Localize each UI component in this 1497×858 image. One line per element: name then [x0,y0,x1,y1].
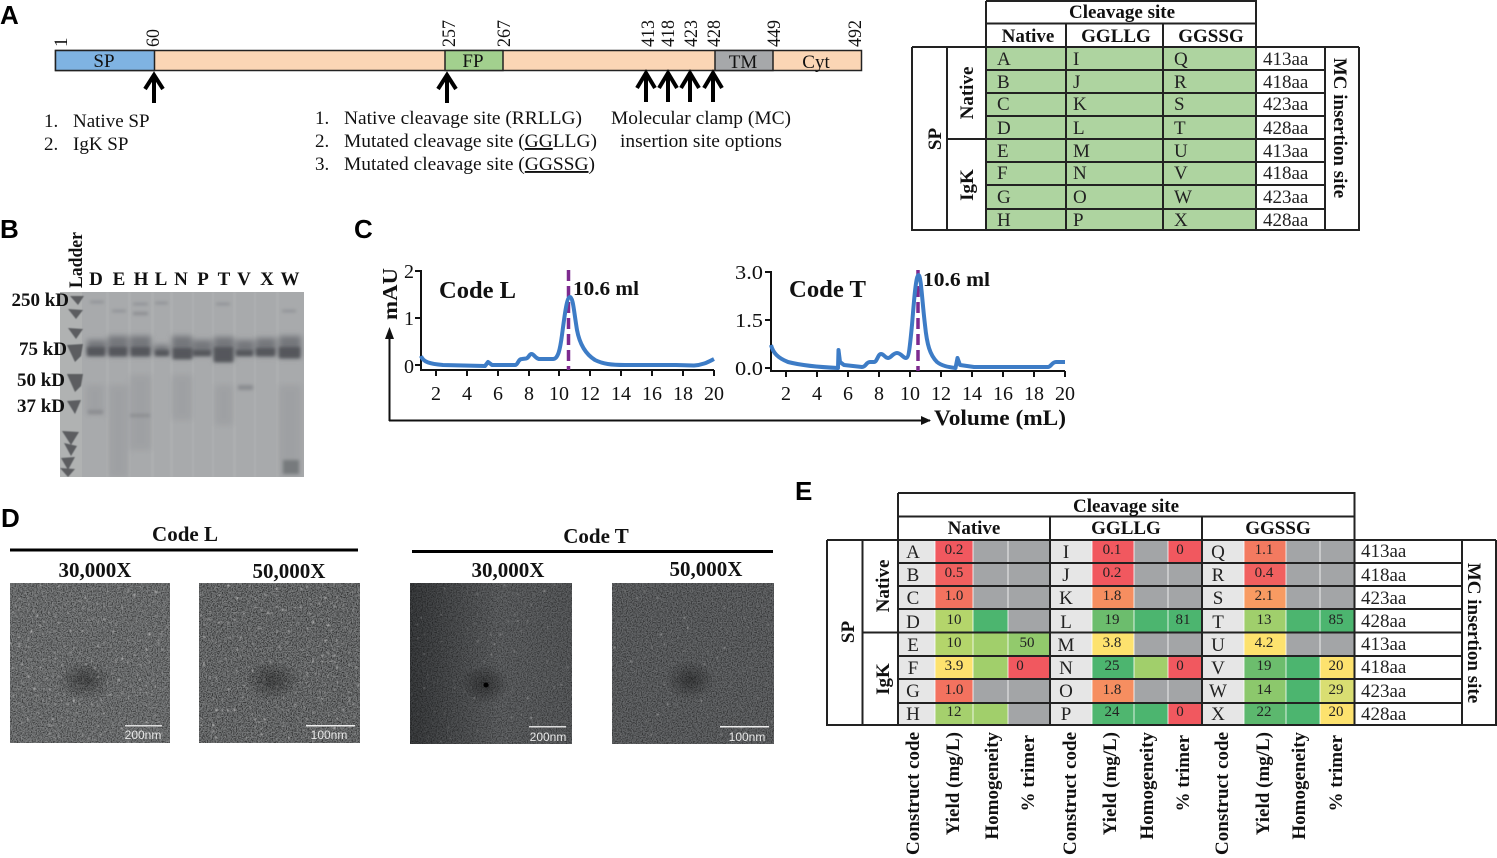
domain labels [93,51,830,73]
Code T heading [412,524,773,553]
molecular weight markers [11,290,69,417]
construct code letters: E [907,635,919,656]
Code L heading: Code L [152,522,218,546]
residue position numbers: 418 [658,20,679,47]
micrograph: Code L 30,000X: 200nm [125,728,161,742]
cleavage site options: 1. [315,108,329,129]
chart: Code L: 0 [404,356,414,378]
magnification labels: 30,000X [472,558,544,582]
side labels: IgK [957,169,978,201]
construct code letters: S [1213,588,1223,609]
MC insertion site labels: 423aa [1361,681,1407,702]
construct letters: T [1174,118,1186,139]
table headers [1002,2,1244,47]
chart: Code L [404,261,724,405]
construct code letters: L [1060,612,1072,633]
micrograph: Code T 50,000X [612,583,774,744]
Volume axis title: Volume (mL) [934,405,1066,430]
measured values: 0 [1176,704,1184,720]
MC insertion site labels [1361,541,1407,725]
construct code letters: U [1211,635,1225,656]
chart: Code L: 18 [673,383,693,405]
construct code letters: D [906,612,920,633]
residue position numbers: 428 [704,20,725,47]
micrograph: Code L 50,000X [199,583,360,743]
heatmap side labels: SP [838,621,859,643]
column labels: Yield (mg/L) [1100,732,1121,835]
chart: Code T: 16 [993,383,1013,405]
measured values: 2.1 [1255,588,1273,604]
construct code letters: B [907,565,919,586]
lane labels: T [218,269,231,290]
measured values: 19 [1256,658,1272,674]
residue position numbers: 492 [845,20,866,47]
construct letters: 413aa [1263,49,1309,70]
construct letters: 423aa [1263,94,1309,115]
ladder bands [60,296,84,477]
chart: Code L: 6 [493,383,503,405]
panel D: electron micrographs [1,503,774,744]
construct letters: N [1073,163,1087,184]
chart: Code L: 10.6 ml [573,278,639,300]
heatmap side labels: MC insertion site [1463,563,1484,703]
chart: Code L: 10 [549,383,569,405]
heatmap side labels: IgK [873,663,894,695]
heatmap headers: Native [948,518,1000,539]
molecular clamp note: insertion site options [620,131,782,152]
construct code letters: G [906,681,920,702]
lane labels: X [260,269,274,290]
measured values: 85 [1328,612,1344,628]
heatmap headers: Cleavage site [1073,496,1179,517]
construct letters: D [997,118,1011,139]
panel C: size exclusion chromatograms [354,214,1075,430]
measured values: 20 [1328,704,1344,720]
chart: Code T: 12 [931,383,951,405]
construct code letters: W [1209,681,1227,702]
measured values: 1.8 [1103,588,1121,604]
residue position numbers: 449 [764,20,785,47]
heatmap row B J R [898,563,1354,586]
table headers: GGLLG [1081,26,1151,47]
measured values: 0 [1176,542,1184,558]
chart: Code T: Code T [789,277,866,303]
magnification labels: 50,000X [253,559,325,583]
heatmap row H P X [898,703,1354,725]
MC insertion site labels: 428aa [1361,611,1407,632]
lane labels: P [197,269,209,290]
side labels [925,58,1350,201]
construct letters: P [1073,210,1084,231]
construct letters: F [997,163,1008,184]
magnification labels [59,557,742,583]
residue position numbers: 1 [51,38,72,47]
chart: Code T: 18 [1024,383,1044,405]
chart: Code L: 4 [462,383,472,405]
chart: Code T: 0.0 [735,358,763,380]
chart: Code T: 10.6 ml [923,269,990,291]
construct code letters: F [908,658,918,679]
table headers: GGSSG [1178,26,1244,47]
residue position numbers: 257 [439,20,460,47]
magnification labels: 30,000X [59,558,131,582]
lane labels: D [89,269,103,290]
construct code letters: I [1063,542,1069,563]
column labels: % trimer [1326,734,1347,811]
micrograph: Code L 30,000X [10,583,170,743]
molecular weight markers: 250 kD [11,290,69,311]
lane labels: W [280,269,300,290]
construct letters: M [1073,141,1090,162]
heatmap row G O W [898,679,1354,703]
gel image [60,292,304,477]
chart: Code L: 20 [704,383,724,405]
heatmap row A I Q [898,540,1354,563]
domain labels: TM [729,52,757,73]
lane labels: E [113,269,125,290]
chart: Code L: 12 [580,383,600,405]
measured values: 12 [946,704,962,720]
construct letters: J [1073,72,1080,93]
site arrows [145,73,722,103]
side labels: SP [925,128,946,150]
chart: Code T: 8 [874,383,884,405]
construct code letters: J [1062,565,1070,586]
construct code letters: K [1059,588,1073,609]
measured values: 20 [1328,658,1344,674]
construct letters: S [1174,94,1185,115]
residue position numbers: 413 [638,20,659,47]
measured values: 10 [946,635,962,651]
panel letter C: C [354,214,373,244]
measured values: 0.2 [1103,565,1121,581]
construct letters: C [997,94,1010,115]
MC insertion site labels: 418aa [1361,565,1407,586]
measured values [945,542,1344,720]
molecular weight markers: 37 kD [17,396,65,417]
construct letters: H [997,210,1011,231]
measured values: 14 [1256,682,1272,698]
signal peptide options [44,111,150,155]
molecular clamp note: Molecular clamp (MC) [611,108,791,129]
table headers: Native [1002,26,1054,47]
chart: Code T [735,262,1075,405]
panel letter B: B [0,214,19,244]
heatmap side labels: Native [873,560,894,612]
construct code letters: C [907,588,919,609]
construct code letters: P [1061,704,1071,725]
measured values: 29 [1328,682,1344,698]
axis arrowheads [385,327,931,425]
protein domain bar [56,50,862,70]
construct letters: 428aa [1263,118,1309,139]
heatmap row C K S [898,586,1354,609]
signal peptide options: 1. [44,111,58,132]
construct letters: O [1073,187,1087,208]
measured values: 0.5 [945,565,963,581]
green code cells [986,47,1256,230]
panel letter A: A [0,0,19,30]
residue position numbers: 423 [681,20,702,47]
measured values: 25 [1104,658,1120,674]
domain labels: Cyt [802,52,830,73]
panel letter D: D [1,503,20,533]
heatmap side labels [838,560,1484,703]
construct letters: 413aa [1263,141,1309,162]
measured values: 0.4 [1255,565,1274,581]
measured values: 1.0 [945,682,963,698]
measured values: 1.1 [1255,542,1273,558]
construct letters: E [997,141,1009,162]
table grid [912,1,1359,230]
panel A: construct code table [912,1,1359,231]
micrograph: Code L 50,000X: 100nm [311,728,347,742]
MC insertion site labels: 418aa [1361,657,1407,678]
chart: Code T: 2 [781,383,791,405]
measured values: 0.2 [945,542,963,558]
construct letters: 423aa [1263,187,1309,208]
chart: Code L: 14 [611,383,631,405]
column labels: % trimer [1018,734,1039,811]
column labels: Construct code [1060,732,1081,855]
measured values: 4.2 [1255,635,1273,651]
molecular weight markers: 75 kD [19,339,67,360]
construct letters: 428aa [1263,210,1309,231]
chart: Code T: 20 [1055,383,1075,405]
construct letters: I [1073,49,1079,70]
signal peptide options: Native SP [73,111,150,132]
construct letters: K [1073,94,1087,115]
MC insertion site labels: 423aa [1361,588,1407,609]
MC insertion site labels: 413aa [1361,634,1407,655]
MC insertion site labels: 428aa [1361,704,1407,725]
cleavage site options: 2. [315,131,329,152]
heatmap headers: GGSSG [1245,518,1311,539]
chart: Code T: 1.5 [735,310,763,332]
cleavage site options [315,108,597,175]
construct letters: R [1174,72,1187,93]
chart: Code L: 16 [642,383,662,405]
signal peptide options: 2. [44,134,58,155]
cleavage site options: Mutated cleavage site (GGSSG) [344,154,595,175]
measured values: 24 [1104,704,1120,720]
residue position numbers: 267 [494,20,515,47]
construct letters [997,49,1309,231]
construct code letters: R [1212,565,1225,586]
side labels: Native [957,67,978,119]
construct code letters: O [1059,681,1073,702]
construct letters: L [1073,118,1085,139]
construct letters: G [997,187,1011,208]
construct code letters: H [906,704,920,725]
signal peptide options: IgK SP [73,134,128,155]
measured values: 0 [1016,658,1024,674]
heatmap row D L T [898,609,1354,633]
panel B: SDS-PAGE gel [0,214,304,477]
panel E: construct characterization heatmap [795,476,1496,855]
construct letters: V [1174,163,1188,184]
chart: Code T: 14 [962,383,982,405]
measured values: 50 [1020,635,1034,651]
column labels: Construct code [903,732,924,855]
construct code letters: X [1211,704,1225,725]
chart: Code T: 6 [843,383,853,405]
construct code letters [906,542,1227,725]
cleavage site options: Mutated cleavage site (GGLLG) [344,131,597,152]
micrograph: Code T 30,000X [410,583,572,744]
column labels: Homogeneity [982,732,1003,840]
magnification labels: 50,000X [670,557,742,581]
measured values: 81 [1176,612,1190,628]
chart: Code L: 2 [404,261,414,283]
heatmap headers [948,496,1311,539]
micrograph: Code T 30,000X: 200nm [530,730,566,744]
chart: Code L: 1 [404,308,414,330]
measured values: 3.9 [945,658,963,674]
chart: Code T: 4 [812,383,822,405]
lane labels: V [237,269,251,290]
construct letters: B [997,72,1010,93]
chart: Code L: 8 [524,383,534,405]
lane labels: L [155,269,167,290]
heatmap inner cell separators [935,540,1320,725]
ladder heading: Ladder [66,231,87,288]
domain labels: SP [93,51,115,72]
residue position numbers: 60 [143,29,164,47]
measured values: 10 [946,612,962,628]
column labels [903,732,1347,855]
column labels: Yield (mg/L) [943,732,964,835]
heatmap headers: GGLLG [1091,518,1161,539]
construct code letters: A [906,542,920,563]
panel A: construct domain map [0,0,866,175]
cleavage site options: Native cleavage site (RRLLG) [344,108,582,129]
mAU axis title: mAU [378,268,402,320]
construct letters: X [1174,210,1188,231]
chart: Code T: 10 [900,383,920,405]
construct code letters: N [1059,658,1073,679]
measured values: 19 [1104,612,1120,628]
chart: Code L: Code L [439,278,516,304]
column labels: % trimer [1173,734,1194,811]
chart: Code L: 2 [431,383,441,405]
panel letter E: E [795,476,812,506]
Code L heading [10,522,358,552]
lane labels [89,269,300,290]
column labels: Homogeneity [1137,732,1158,840]
measured values: 13 [1256,612,1272,628]
construct code letters: V [1211,658,1225,679]
column labels: Homogeneity [1289,732,1310,840]
measured values: 1.0 [945,588,963,604]
construct letters: W [1174,187,1192,208]
side labels: MC insertion site [1329,58,1350,198]
construct letters: Q [1174,49,1188,70]
measured values: 3.8 [1103,635,1121,651]
molecular clamp note [611,108,791,152]
heatmap row F N V [898,656,1354,679]
micrograph: Code T 50,000X: 100nm [729,730,765,744]
measured values: 0.1 [1103,542,1121,558]
construct code letters: Q [1211,542,1225,563]
table headers: Cleavage site [1069,2,1175,23]
construct letters: 418aa [1263,163,1309,184]
measured values: 22 [1256,704,1272,720]
measured values: 1.8 [1103,682,1121,698]
construct code letters: T [1212,612,1224,633]
shared axis arrows [389,330,930,421]
heatmap grid [827,493,1496,725]
residue position numbers [51,20,866,47]
MC insertion site labels: 413aa [1361,541,1407,562]
measured values: 0 [1176,658,1184,674]
lane labels: N [174,269,188,290]
construct letters: A [997,49,1011,70]
cleavage site options: 3. [315,154,329,175]
Code T heading: Code T [563,524,629,548]
construct code letters: M [1058,635,1075,656]
chart: Code T: 3.0 [735,262,763,284]
lane labels: H [134,269,149,290]
column labels: Yield (mg/L) [1253,732,1274,835]
molecular weight markers: 50 kD [17,370,65,391]
heatmap row E M U [898,633,1354,656]
column labels: Construct code [1212,732,1233,855]
domain labels: FP [462,51,484,72]
construct letters: 418aa [1263,72,1309,93]
construct letters: U [1174,141,1188,162]
